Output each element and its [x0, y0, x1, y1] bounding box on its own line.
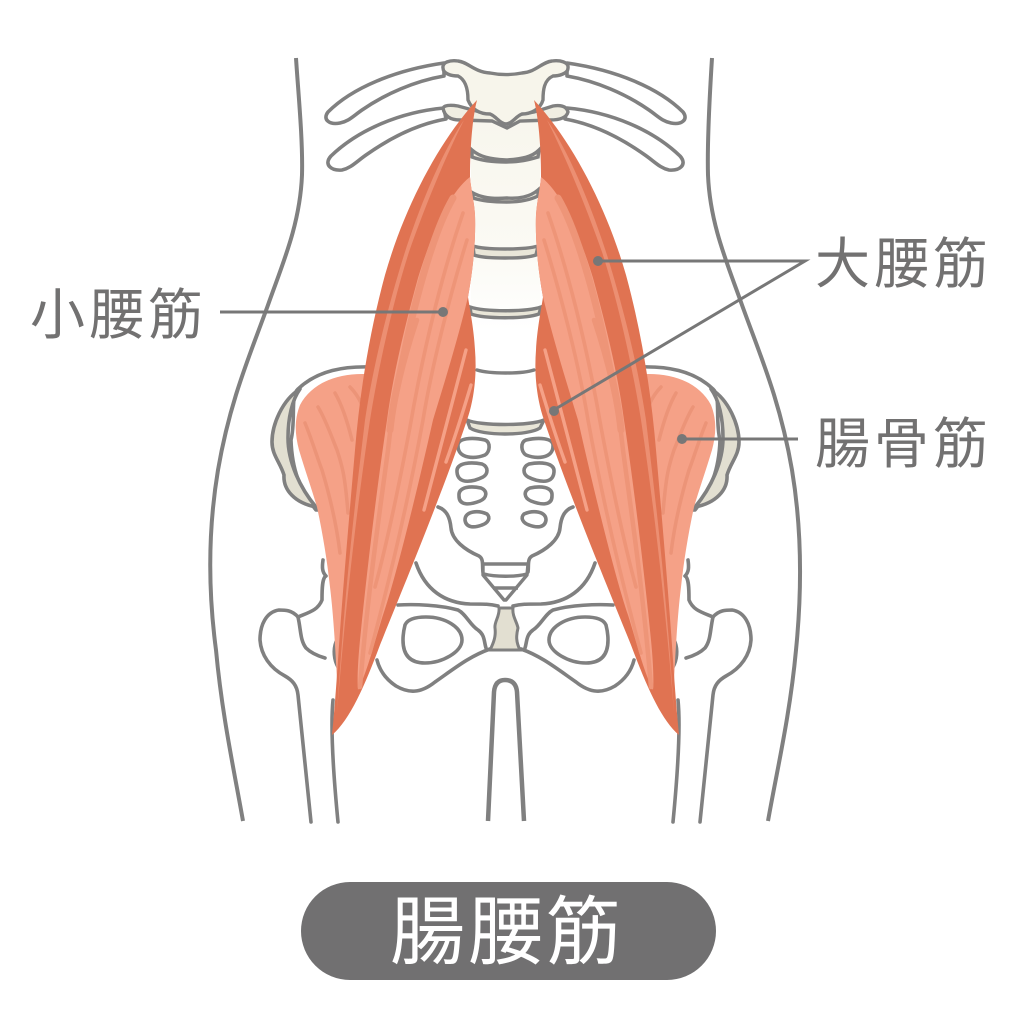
ribs: right	[565, 63, 685, 170]
title pill	[301, 882, 716, 980]
leader: 大腰筋	[549, 256, 805, 416]
muscle: iliacus right	[591, 374, 715, 700]
ribs: left	[326, 63, 446, 170]
pubic symphysis	[490, 608, 520, 650]
leader: 小腰筋	[220, 307, 448, 317]
skeleton	[260, 61, 751, 822]
leader: 腸骨筋	[677, 434, 798, 444]
hip and femur: left	[260, 367, 498, 822]
muscle: psoas left	[332, 100, 477, 735]
label: 小腰筋: 小腰筋	[30, 284, 207, 346]
sacrum lines	[483, 564, 528, 600]
title text: 腸腰筋	[390, 890, 624, 974]
body outline: right side	[708, 58, 800, 821]
vertebral column	[443, 61, 568, 434]
label: 大腰筋: 大腰筋	[815, 233, 992, 295]
muscle: iliacus left	[296, 374, 420, 700]
body outline: left side	[210, 58, 302, 821]
hip and femur: right	[513, 367, 751, 822]
label: 腸骨筋: 腸骨筋	[815, 413, 992, 475]
femoral gap between legs	[488, 680, 524, 821]
muscle: psoas right	[534, 100, 679, 735]
